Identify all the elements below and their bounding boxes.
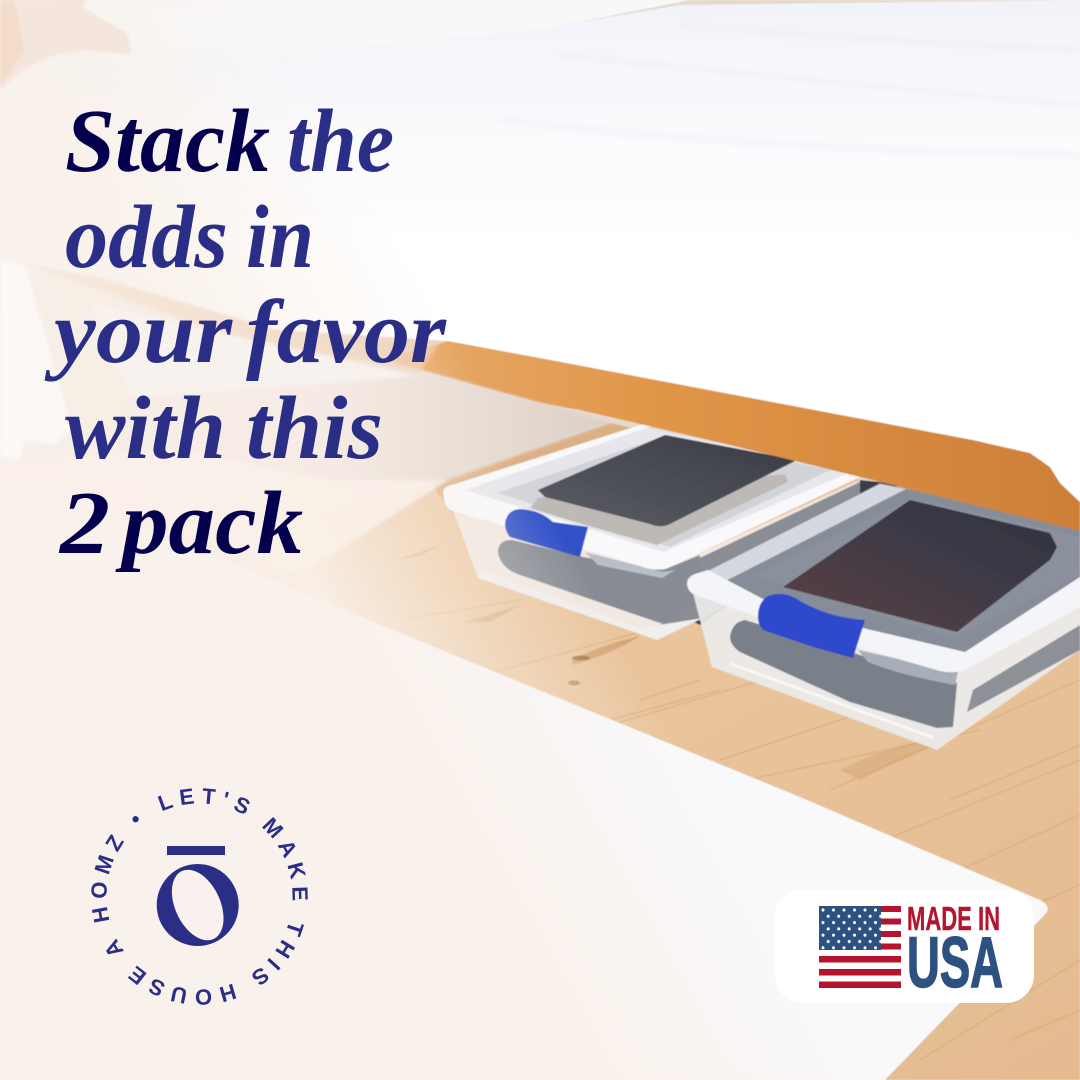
bed frame: orange wood xyxy=(380,341,1080,531)
right box lower flap xyxy=(858,650,958,685)
headline line 5: pack xyxy=(115,474,303,573)
right box lid panel xyxy=(752,498,1080,638)
left box blue latch xyxy=(505,509,588,557)
pale floor xyxy=(0,450,448,575)
left box folded cloth xyxy=(498,540,700,623)
left box lid panel xyxy=(497,435,830,547)
left box lid xyxy=(443,427,860,562)
storage box: left xyxy=(443,424,862,640)
right box body xyxy=(693,593,1080,750)
left box dark pillow xyxy=(538,435,797,526)
headline line 1: Stack xyxy=(65,92,270,191)
bed sheet xyxy=(0,0,1080,502)
right box dark pillow xyxy=(783,500,1057,632)
right box blue latch xyxy=(758,594,865,658)
american flag icon xyxy=(819,906,901,988)
storage box: right xyxy=(687,483,1080,750)
wall corner stripe xyxy=(0,0,24,88)
headline line 3: favor xyxy=(246,283,447,382)
right box inner side shading xyxy=(967,625,1080,712)
headline line 4: with xyxy=(65,379,226,478)
wall top-left xyxy=(0,0,131,91)
badge background xyxy=(775,889,1034,1003)
left box rim xyxy=(443,424,862,570)
right box lid xyxy=(687,483,1080,655)
sheet folds xyxy=(500,25,1080,155)
logo letter o xyxy=(157,862,239,948)
headline line 2 xyxy=(65,188,314,287)
pale window panel xyxy=(90,303,415,398)
curtain xyxy=(0,258,72,460)
headline xyxy=(44,92,447,573)
headline line 5: 2 xyxy=(58,474,110,573)
left box towel xyxy=(530,474,788,545)
floor knots xyxy=(572,636,640,665)
right box lid side highlight xyxy=(700,484,906,590)
wall xyxy=(0,0,1080,640)
headline line 1: the xyxy=(287,92,394,191)
white rug xyxy=(0,486,1048,1080)
logo circular text: LET'S MAKE THIS HOUSE A HOMZ • xyxy=(91,788,308,1005)
floor xyxy=(0,423,1080,1080)
bed pillow xyxy=(81,0,690,57)
left box lower flap xyxy=(585,552,675,578)
wall under bed xyxy=(0,258,610,480)
dark gap between the two boxes xyxy=(690,480,900,625)
left box right side xyxy=(660,482,860,637)
right box rim xyxy=(687,570,1080,672)
badge text: USA: USA xyxy=(907,924,1003,1003)
headline line 3: your xyxy=(44,283,233,382)
floor grain xyxy=(400,600,1080,1060)
made in USA badge xyxy=(775,889,1034,1003)
right box folded cloth xyxy=(730,620,957,728)
logo bar xyxy=(167,846,225,855)
round logo xyxy=(91,788,308,1005)
left box bottom lip xyxy=(478,570,703,640)
headline line 2: in xyxy=(246,188,314,287)
left box body xyxy=(453,480,860,640)
faded room details under overlay xyxy=(0,0,610,575)
headline line 2: odds xyxy=(65,188,228,287)
headline line 4: this xyxy=(246,379,383,478)
floor strip behind boxes xyxy=(430,423,650,500)
right box bottom lip xyxy=(730,662,933,739)
headline line 4 xyxy=(65,379,383,478)
headline line 1 xyxy=(65,92,394,191)
peach bed frame band xyxy=(20,262,440,372)
badge text: made in: MADE IN xyxy=(907,900,1000,937)
headline line 3 xyxy=(44,283,447,382)
